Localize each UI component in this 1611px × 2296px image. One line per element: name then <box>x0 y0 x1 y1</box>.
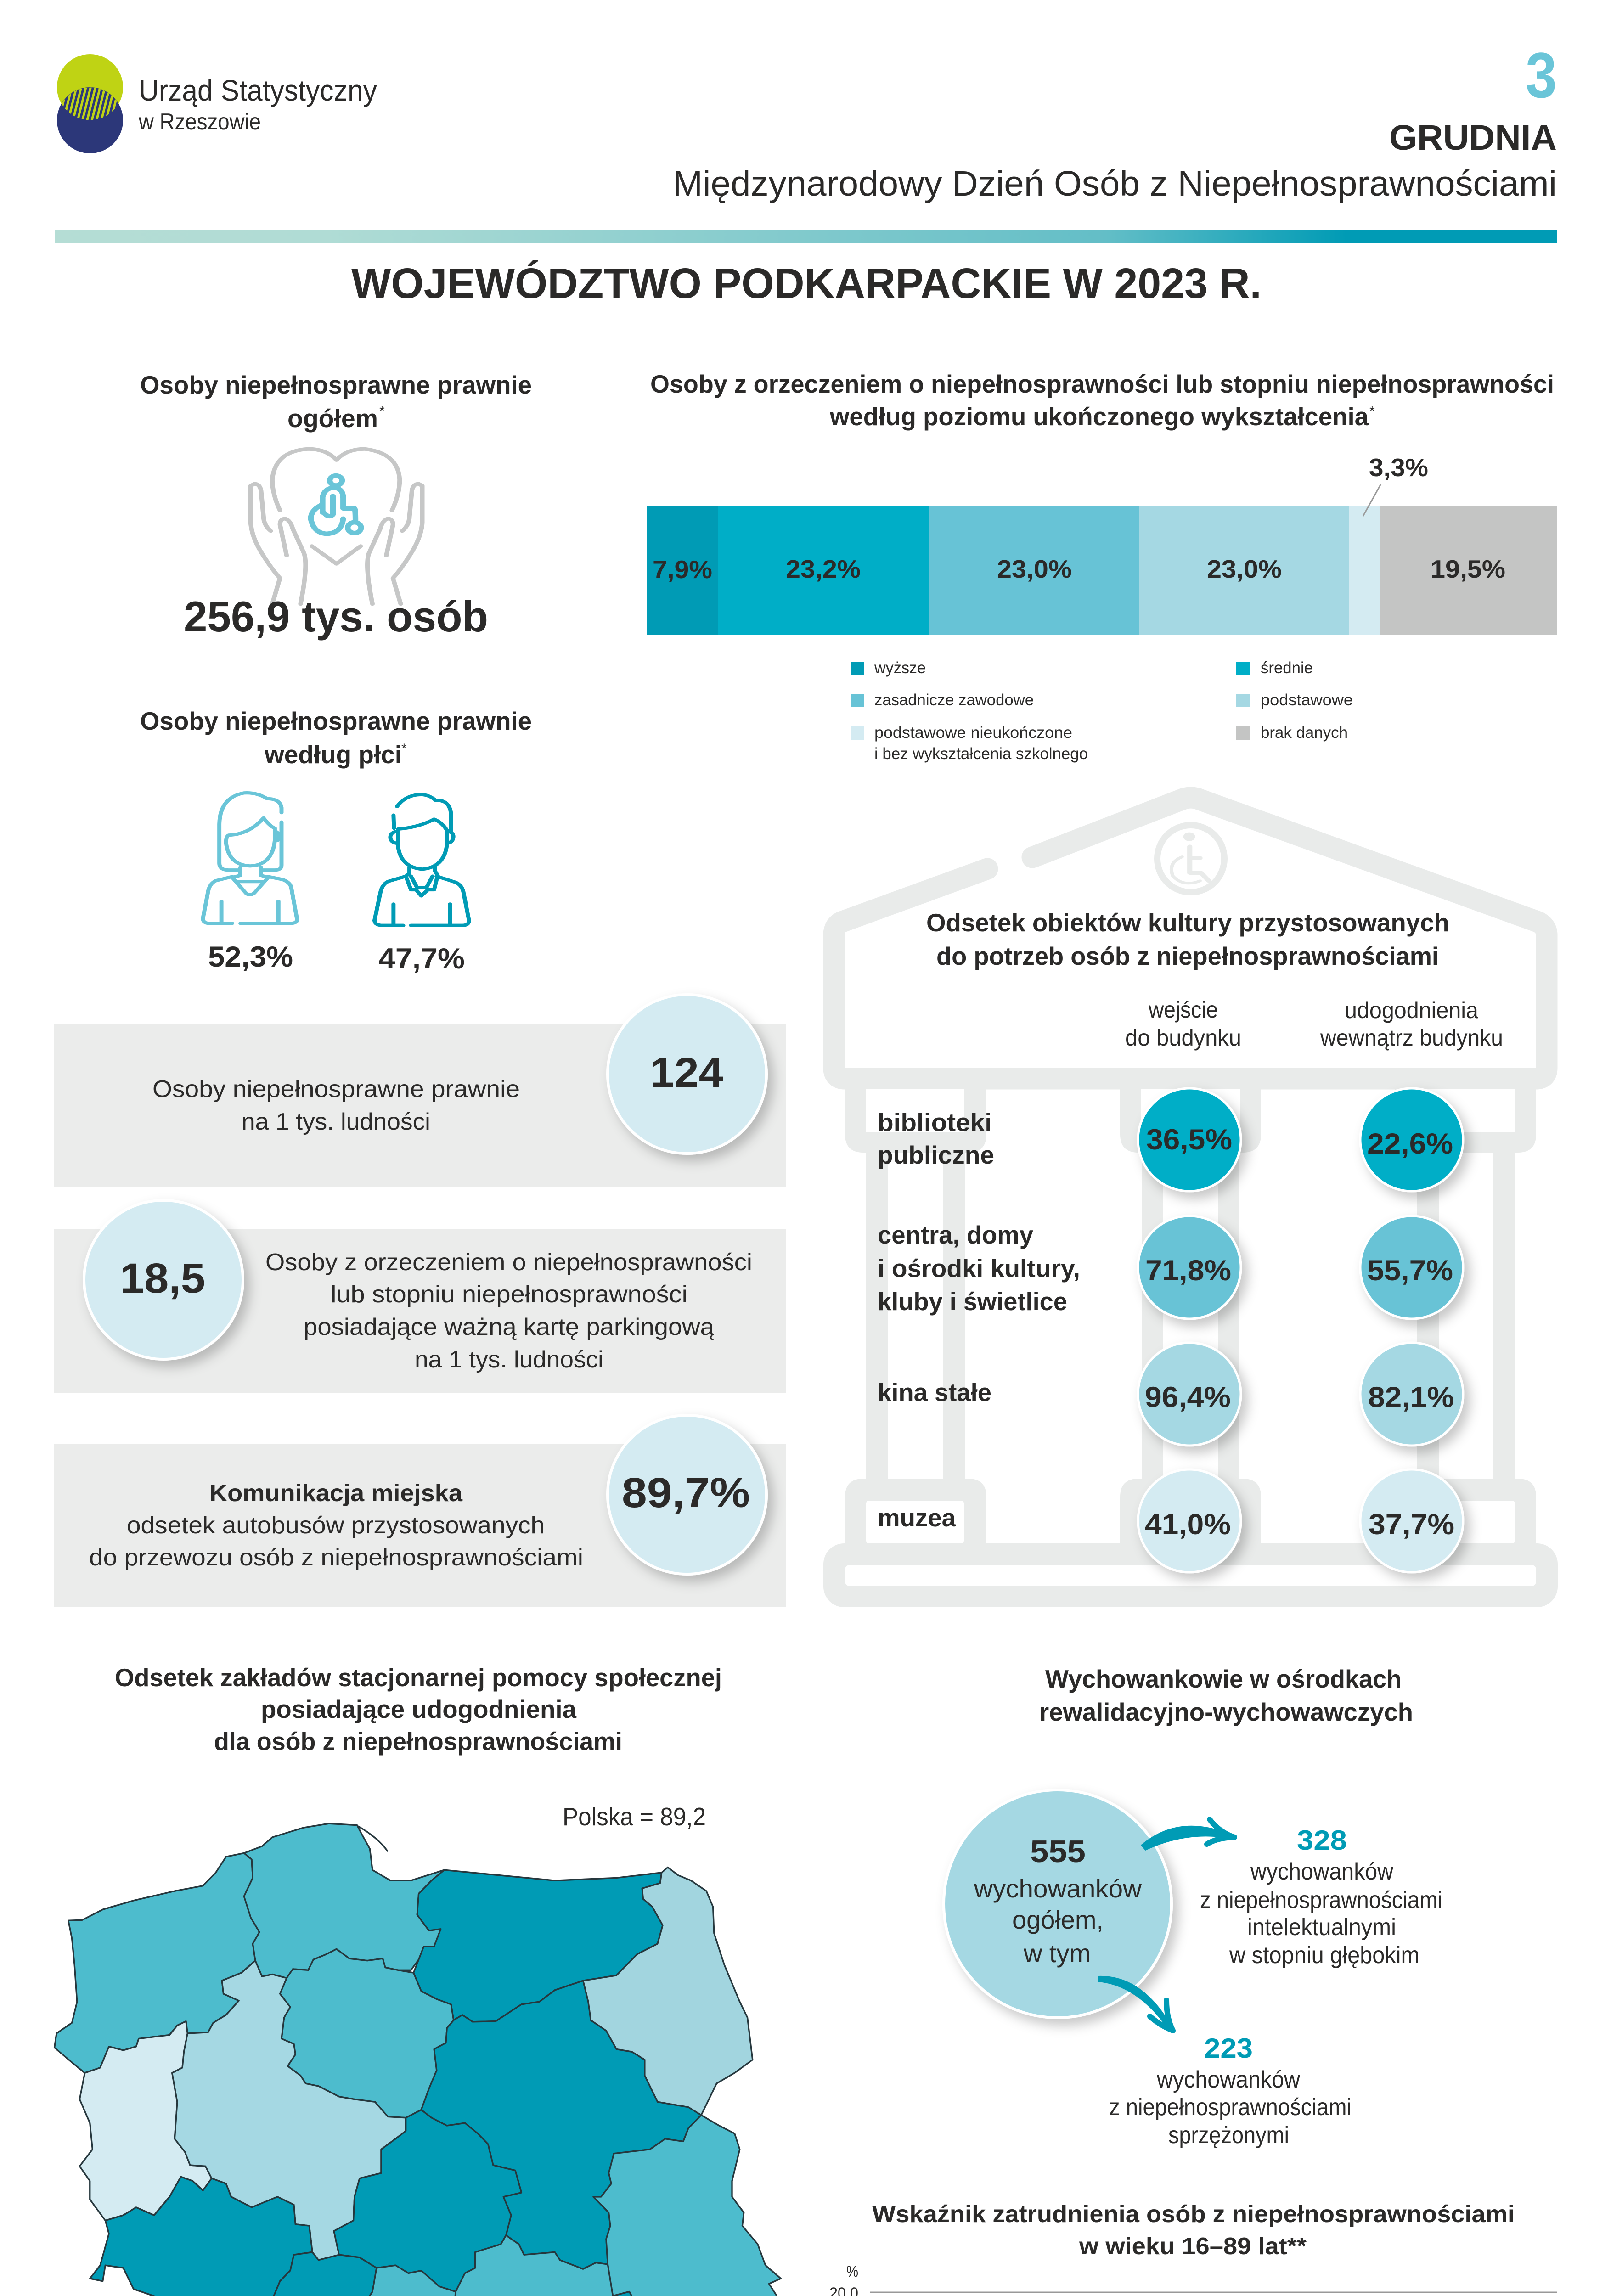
value circles: culture: 37,7% <box>1369 1508 1454 1541</box>
date heading: GRUDNIA <box>1389 118 1557 158</box>
text: parking card: na 1 tys. ludności <box>415 1346 603 1373</box>
text: city transport: do przewozu osób z niepełnosprawnościami <box>89 1544 583 1571</box>
text: per 1000: na 1 tys. ludności <box>242 1109 430 1135</box>
building illustration <box>823 798 1558 1607</box>
value circles: culture: 22,6% <box>1367 1128 1453 1160</box>
row label: museums: muzea <box>878 1503 956 1532</box>
bar chart: employment rate 2014-2023 <box>829 2263 1557 2296</box>
row label: culture centres <box>878 1221 1080 1316</box>
icon: woman <box>203 793 297 923</box>
value: 223 pupils: 223 <box>1204 2033 1253 2064</box>
text: parking card <box>265 1249 752 1373</box>
panel: culture building <box>823 798 1558 1607</box>
panel: employment rate chart <box>829 2201 1557 2296</box>
heading: employment rate: w wieku 16–89 lat** <box>1079 2233 1307 2260</box>
value: men 47,7%: 47,7% <box>378 943 465 975</box>
text: city transport: odsetek autobusów przystosowanych <box>127 1512 545 1539</box>
value circles: culture: 41,0% <box>1145 1508 1231 1541</box>
heading: map: Odsetek zakładów stacjonarnej pomocy społecznej <box>115 1663 722 1692</box>
logo: Urząd Statystyczny: Urząd Statystyczny <box>139 74 377 107</box>
stacked bar chart: 3,3% <box>1369 453 1428 482</box>
value circle: 18,5: 18,5 <box>120 1255 205 1302</box>
icon: man <box>374 794 469 925</box>
legend: education levels: brak danych <box>1261 724 1348 742</box>
text: parking card: Osoby z orzeczeniem o niepełnosprawności <box>265 1249 752 1276</box>
value: 223 pupils: sprzężonymi <box>1168 2122 1289 2149</box>
legend: education levels <box>851 659 1353 763</box>
arrow: to 328 <box>1141 1819 1234 1851</box>
circle: 555 pupils total: w tym <box>1023 1939 1091 1968</box>
value: 328 pupils <box>1200 1825 1442 1969</box>
text: city transport <box>89 1480 583 1571</box>
value circles: culture: 36,5% <box>1146 1124 1232 1156</box>
icon: hands holding heart with wheelchair <box>251 449 422 604</box>
heading: education: Osoby z orzeczeniem o niepełnosprawności lub stopniu niepełnosprawności <box>650 370 1554 398</box>
legend: education levels: wyższe <box>874 659 926 677</box>
panel: per 1000 population <box>54 995 786 1187</box>
text: per 1000 <box>152 1076 520 1135</box>
arrow: to 223 <box>1098 1976 1174 2032</box>
heading: education: według poziomu ukończonego wykształcenia <box>829 402 1369 431</box>
logo: Urząd Statystyczny: w Rzeszowie <box>138 109 261 135</box>
value circles: culture <box>1138 1088 1463 1572</box>
title: WOJEWÓDZTWO PODKARPACKIE W 2023 R. <box>351 259 1262 307</box>
logo: Urząd Statystyczny <box>57 54 377 153</box>
row label: libraries <box>878 1108 994 1169</box>
stacked bar chart: 7,9% <box>653 555 712 584</box>
bar chart: employment rate 2014-2023: % <box>846 2263 858 2280</box>
legend: education levels: podstawowe <box>1261 691 1353 709</box>
circle: 555 pupils total <box>944 1790 1172 2018</box>
panel: map of social care facilities <box>55 1663 781 2296</box>
value: 223 pupils <box>1109 2033 1352 2149</box>
circle: 555 pupils total: wychowanków <box>974 1874 1142 1903</box>
heading: total: ogółem <box>287 404 378 433</box>
stacked bar chart: 23,2% <box>786 555 861 583</box>
value circles: culture: 82,1% <box>1368 1381 1454 1413</box>
value: 328 pupils: wychowanków <box>1250 1858 1393 1885</box>
heading: culture: do potrzeb osób z niepełnosprawnościami <box>936 942 1439 970</box>
panel: parking card <box>54 1200 786 1393</box>
panel: total persons with disabilities <box>140 371 532 641</box>
row label: culture centres: kluby i świetlice <box>878 1287 1067 1316</box>
row label: culture centres: centra, domy <box>878 1221 1033 1249</box>
legend: education levels: zasadnicze zawodowe <box>874 691 1034 709</box>
value: 328 pupils: w stopniu głębokim <box>1229 1942 1419 1969</box>
value circle: 89,7%: 89,7% <box>622 1469 750 1516</box>
date heading: 3 <box>1526 39 1557 111</box>
gradient divider bar <box>55 230 1557 243</box>
heading: by sex: Osoby niepełnosprawne prawnie <box>140 707 532 735</box>
row label: libraries: publiczne <box>878 1141 994 1169</box>
legend: education levels: i bez wykształcenia szkolnego <box>874 745 1088 763</box>
value: women 52,3%: 52,3% <box>208 941 293 973</box>
heading: pupils: Wychowankowie w ośrodkach <box>1045 1665 1402 1693</box>
heading: map: posiadające udogodnienia <box>261 1695 576 1723</box>
value circles: culture: 96,4% <box>1145 1381 1231 1413</box>
value circle: 124 <box>608 995 766 1154</box>
panel: city transport <box>54 1415 786 1607</box>
heading: map <box>115 1663 722 1756</box>
value: 223 pupils: wychowanków <box>1156 2066 1300 2093</box>
heading: map: dla osób z niepełnosprawnościami <box>214 1727 622 1756</box>
heading: employment rate <box>872 2201 1515 2260</box>
column header: facilities inside: udogodnienia <box>1345 997 1478 1023</box>
value: 256,9 thousand: 256,9 tys. osób <box>184 592 488 641</box>
heading: culture: Odsetek obiektów kultury przystosowanych <box>926 908 1449 937</box>
value circle: 89,7% <box>608 1415 766 1574</box>
heading: education: * <box>1369 404 1375 419</box>
row label: culture centres: i ośrodki kultury, <box>878 1254 1080 1283</box>
value: 328 pupils: 328 <box>1297 1825 1347 1856</box>
heading: pupils <box>1039 1665 1413 1726</box>
heading: pupils: rewalidacyjno-wychowawczych <box>1039 1698 1413 1726</box>
value circle: 124: 124 <box>650 1049 723 1096</box>
value: 328 pupils: z niepełnosprawnościami <box>1200 1887 1442 1913</box>
text: parking card: posiadające ważną kartę parkingową <box>304 1314 714 1340</box>
panel: by sex <box>140 707 532 975</box>
column header: entrance: do budynku <box>1125 1025 1241 1051</box>
circle: 555 pupils total: ogółem, <box>1012 1905 1104 1934</box>
stacked bar chart: 19,5% <box>1431 555 1505 583</box>
label: Poland value: Polska = 89,2 <box>563 1802 706 1831</box>
column header: facilities inside: wewnątrz budynku <box>1320 1025 1503 1051</box>
stacked bar chart: 23,0% <box>1207 555 1282 583</box>
row label: libraries: biblioteki <box>878 1108 992 1137</box>
legend: education levels: średnie <box>1261 659 1313 677</box>
value circle: 18,5 <box>84 1200 243 1359</box>
heading: by sex: według płci <box>264 740 402 769</box>
heading: total: * <box>379 404 385 419</box>
value circles: culture: 55,7% <box>1367 1255 1453 1287</box>
panel: education stacked bar <box>647 370 1557 763</box>
column header: entrance <box>1125 997 1241 1051</box>
column header: entrance: wejście <box>1148 997 1218 1023</box>
value circles: culture: 71,8% <box>1145 1255 1231 1287</box>
heading: total: Osoby niepełnosprawne prawnie <box>140 371 532 399</box>
choropleth map of Poland <box>55 1823 781 2296</box>
stacked bar chart: 23,0% <box>997 555 1072 583</box>
icon: wheelchair sign <box>1157 825 1224 892</box>
value: 223 pupils: z niepełnosprawnościami <box>1109 2094 1352 2121</box>
value: 328 pupils: intelektualnymi <box>1247 1914 1396 1941</box>
date heading <box>673 39 1557 203</box>
heading: culture <box>926 908 1449 970</box>
legend: education levels: podstawowe nieukończone <box>874 724 1072 742</box>
heading: by sex <box>140 707 532 769</box>
row label: cinemas: kina stałe <box>878 1378 991 1407</box>
heading: education <box>650 370 1554 431</box>
heading: by sex: * <box>401 741 407 756</box>
heading: employment rate: Wskaźnik zatrudnienia osób z niepełnosprawnościami <box>872 2201 1515 2228</box>
text: city transport: Komunikacja miejska <box>209 1480 463 1507</box>
column header: facilities inside <box>1320 997 1503 1051</box>
panel: rehabilitation centre pupils <box>944 1665 1442 2149</box>
text: per 1000: Osoby niepełnosprawne prawnie <box>152 1076 520 1103</box>
circle: 555 pupils total: 555 <box>1030 1834 1086 1869</box>
text: parking card: lub stopniu niepełnosprawności <box>331 1281 687 1308</box>
heading: total <box>140 371 532 433</box>
stacked bar chart <box>647 453 1557 635</box>
date heading: Międzynarodowy Dzień Osób z Niepełnosprawnościami <box>673 164 1557 203</box>
